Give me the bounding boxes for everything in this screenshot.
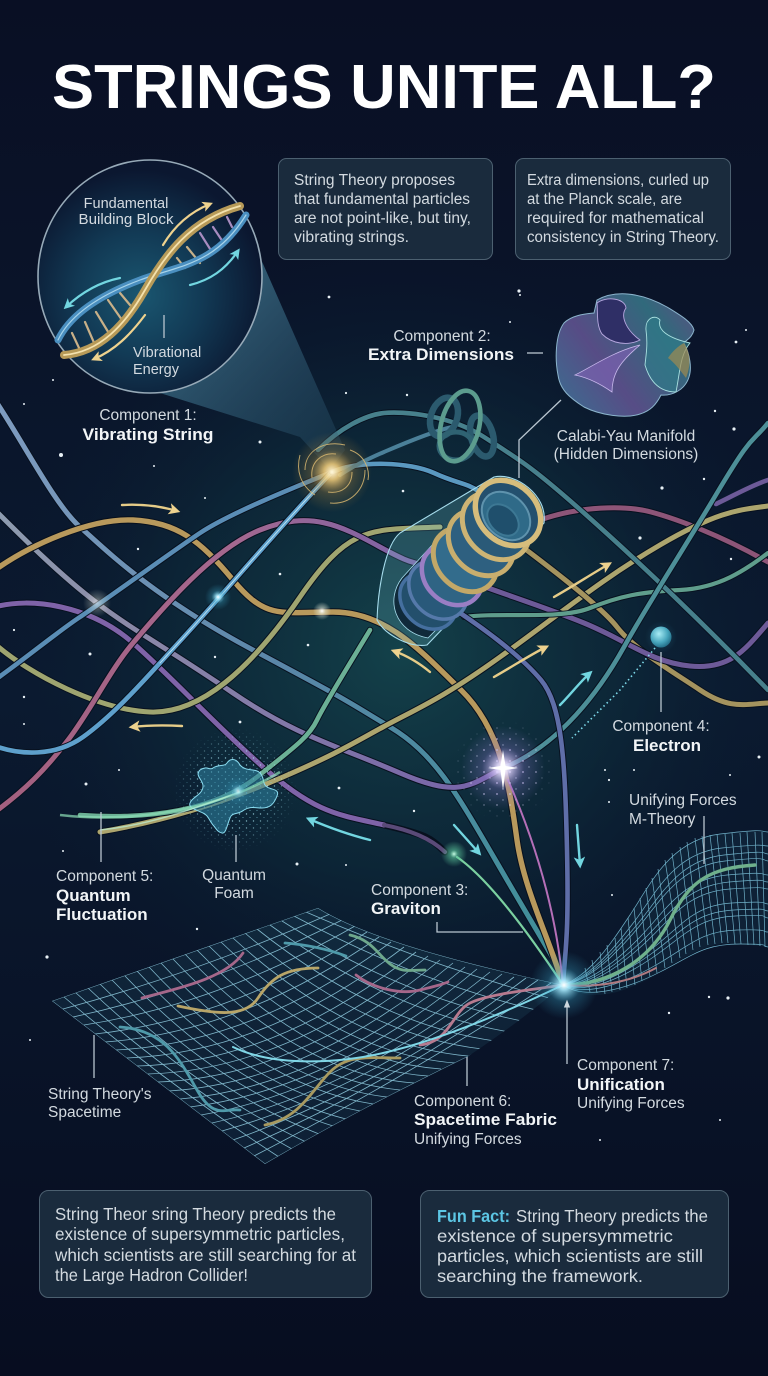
label: quantum foam: Foam [214, 885, 254, 902]
text box: large hadron collider: String Theor sring Theory predicts the [55, 1204, 336, 1224]
label: component 3: Graviton [371, 899, 441, 918]
label: unifying forces m-theory: M-Theory [629, 811, 696, 828]
blue strand and rungs [58, 215, 246, 350]
text box: fun fact: String Theory predicts the [516, 1206, 708, 1226]
rings [388, 467, 554, 641]
sparkles on strings [83, 584, 331, 620]
inset circle [38, 160, 262, 393]
string: gold right [500, 530, 768, 705]
string: gold diagonal [100, 506, 768, 832]
label: string theory's spacetime [48, 1086, 152, 1121]
string: purple right wave [440, 570, 768, 667]
string: purple top right [716, 480, 768, 504]
string: gold top [0, 520, 563, 985]
label: unifying forces m-theory [629, 792, 737, 828]
label: component 1 [82, 407, 214, 444]
label: component 2: Extra Dimensions [368, 345, 514, 364]
text box: fun fact [420, 1190, 728, 1298]
text box: extra dimensions: Extra dimensions, curled up [527, 172, 709, 189]
label: calabi-yau manifold: (Hidden Dimensions) [554, 446, 698, 463]
flow arrows [122, 505, 609, 865]
label: component 3: Component 3: [371, 882, 468, 899]
label: component 7: Unification [577, 1075, 665, 1094]
leader: manifold to cylinder [519, 400, 561, 478]
text box: extra dimensions: at the Planck scale, are [527, 191, 682, 208]
label: component 6 [414, 1093, 557, 1148]
label: component 4 [612, 718, 710, 755]
label: component 3 [371, 882, 468, 918]
label: unifying forces m-theory: Unifying Forces [629, 792, 737, 809]
text box: fun fact: searching the framework. [437, 1266, 643, 1286]
calabi-yau manifold [556, 294, 694, 416]
string: green right [464, 553, 768, 617]
label: fundamental building block: Fundamental [84, 196, 168, 212]
string: teal rising right [503, 423, 768, 768]
label: component 4: Electron [633, 736, 701, 755]
text box: large hadron collider: which scientists are still searching for at [54, 1245, 356, 1265]
text box: string theory intro: are not point-like, but tiny, [294, 210, 471, 227]
callout cone from inset to string [160, 257, 345, 470]
string: pink long [0, 521, 425, 812]
label: component 7: Unifying Forces [577, 1095, 685, 1112]
leader [163, 315, 165, 338]
label: component 5: Fluctuation [56, 905, 148, 924]
label: component 2 [368, 328, 514, 364]
label: component 5: Quantum [56, 886, 131, 905]
title: STRINGS UNITE ALL? [52, 53, 716, 122]
text box: fun fact: existence of supersymmetric [437, 1226, 673, 1246]
stars [13, 289, 760, 1141]
unification point glow [530, 951, 598, 1019]
leader: spacetime [93, 1035, 95, 1078]
text box: string theory intro: vibrating strings. [294, 229, 409, 246]
label: component 1: Vibrating String [82, 425, 214, 444]
inset: vibrating string magnified [38, 160, 262, 393]
text box: string theory intro: that fundamental particles [294, 191, 470, 208]
string: blue-grey long to apex [0, 400, 563, 985]
text box: extra dimensions: consistency in String Theory. [527, 229, 719, 246]
string: blue lower with spark [0, 472, 332, 753]
label line two: Building Block [78, 212, 174, 228]
label: component 4: Component 4: [612, 718, 710, 735]
text box: large hadron collider [40, 1190, 372, 1298]
arrow: unification [566, 1002, 568, 1064]
glass sleeve [377, 476, 544, 645]
string: green upward from foam [80, 630, 370, 816]
string: blue-violet descending [440, 600, 568, 985]
label: component 7 [577, 1057, 685, 1112]
vibrating point glow [292, 432, 372, 512]
label: string theory's spacetime: Spacetime [48, 1104, 121, 1121]
text box: large hadron collider: existence of supersymmetric particles, [55, 1224, 345, 1244]
label: component 7: Component 7: [577, 1057, 674, 1074]
leader: spacetime fabric [466, 1057, 468, 1086]
string: lower arc to knot [340, 427, 452, 475]
strings on m-theory sheet [563, 865, 755, 986]
label: string theory's spacetime: String Theory's [48, 1086, 152, 1103]
label: component 6: Unifying Forces [414, 1131, 522, 1148]
string: blue upper from left [0, 472, 332, 680]
string: teal arc through knot down right [318, 413, 768, 690]
graviton particle [441, 841, 467, 867]
label: component 1: Component 1: [99, 407, 197, 424]
compactified dimension cylinder [377, 467, 554, 645]
text box: string theory intro [278, 158, 492, 260]
quantum foam [60, 730, 292, 850]
label: component 2: Component 2: [393, 328, 491, 345]
dark inner core [394, 484, 538, 638]
electron particle [572, 621, 677, 738]
string: blue from glow to cylinder [332, 464, 480, 492]
text box: large hadron collider: the Large Hadron Collider! [55, 1265, 248, 1285]
cosmic strings tangle [0, 400, 768, 985]
string: pink thin to apex [508, 780, 563, 985]
label: calabi-yau manifold [554, 428, 698, 463]
label: component 6: Component 6: [414, 1093, 511, 1110]
string: green graviton [457, 857, 563, 985]
string: pink right [540, 508, 768, 562]
label: vibrational energy: Vibrational [133, 345, 201, 361]
label: calabi-yau manifold: Calabi-Yau Manifold [557, 428, 695, 445]
leader: component 2 [527, 352, 543, 354]
label: component 6: Spacetime Fabric [414, 1110, 557, 1129]
strings on fabric [120, 935, 563, 1125]
string: purple wave left [0, 603, 445, 852]
text box: extra dimensions [516, 158, 730, 260]
text box: string theory intro: String Theory proposes [294, 172, 455, 189]
text box: extra dimensions: required for mathematical [527, 210, 704, 227]
leader: fluctuation [100, 812, 102, 862]
leader: m-theory [703, 816, 705, 864]
label: quantum foam: Quantum [202, 867, 266, 884]
spacetime fabric mesh [40, 900, 570, 1170]
leader: graviton [437, 922, 523, 932]
m-theory mesh [563, 831, 768, 995]
text box: fun fact: particles, which scientists are still [437, 1246, 703, 1266]
text box: fun fact: Fun Fact: [437, 1206, 510, 1226]
gold strand [64, 206, 240, 355]
string: olive left through to cylinder [0, 527, 440, 712]
knot of string [425, 386, 498, 466]
label line two: Energy [133, 362, 180, 378]
energy star burst [457, 722, 550, 817]
label: quantum foam [202, 867, 266, 902]
leader: electron [660, 652, 662, 712]
string: grey to purple arc [0, 510, 503, 787]
label: component 5: Component 5: [56, 868, 153, 885]
vibration arrows [66, 204, 238, 359]
label: component 5 [56, 868, 153, 924]
leader: quantum foam [235, 835, 237, 862]
